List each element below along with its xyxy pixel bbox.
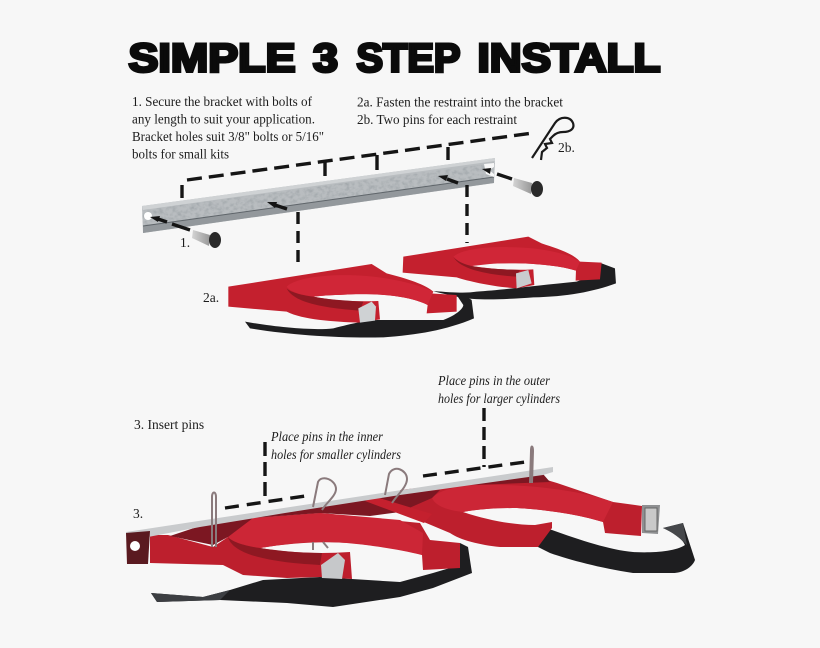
restraint: front, step 2 [228,264,474,337]
bracket: galvanised channel [142,158,495,233]
text: step 1 instructions: 1. Secure the bracket with bolts of [132,94,312,109]
title: STEP [356,36,460,80]
pins [212,446,533,550]
title: INSTALL [478,36,660,80]
restraint: back, step 3 [400,475,695,573]
text: outer holes note: Place pins in the outer [437,373,551,388]
text: inner holes note: holes for smaller cylinders [271,447,401,462]
label: step 3: 3. [133,506,143,521]
icon: bolt 2 [513,178,543,197]
labels [180,140,575,305]
restraint: back, step 2 [403,237,616,299]
text: step 3 heading: 3. Insert pins [134,417,204,432]
text: step 1 instructions: Bracket holes suit 3/8" bolts or 5/16" [132,129,324,144]
text: step 2 instructions: 2b. Two pins for each restraint [357,112,517,127]
title: 3 [313,36,338,80]
title [128,36,660,80]
title: SIMPLE [128,36,296,80]
text: step 2 instructions [357,94,563,127]
text: outer holes note [437,373,560,406]
bracket: step 3 [126,467,553,564]
labels: 1. [180,235,190,250]
arrows into bracket holes [150,168,512,230]
icon: bolt 1 [192,230,221,248]
text: step 1 instructions: bolts for small kits [132,146,229,162]
icon: hair pin [532,118,573,160]
text: step 2 instructions: 2a. Fasten the restraint into the bracket [357,94,563,110]
text: inner holes note [270,429,401,462]
text: outer holes note: holes for larger cylinders [438,391,560,406]
restraint: front, step 3 [150,513,472,607]
dashed lines: bracket to pin [182,133,533,268]
text: inner holes note: Place pins in the inner [270,429,384,444]
dashed lines: step 3 [225,408,525,508]
labels: 2a. [203,290,219,305]
text: step 1 instructions [132,94,324,162]
text: step 1 instructions: any length to suit your application. [132,112,315,126]
labels: 2b. [558,140,575,155]
